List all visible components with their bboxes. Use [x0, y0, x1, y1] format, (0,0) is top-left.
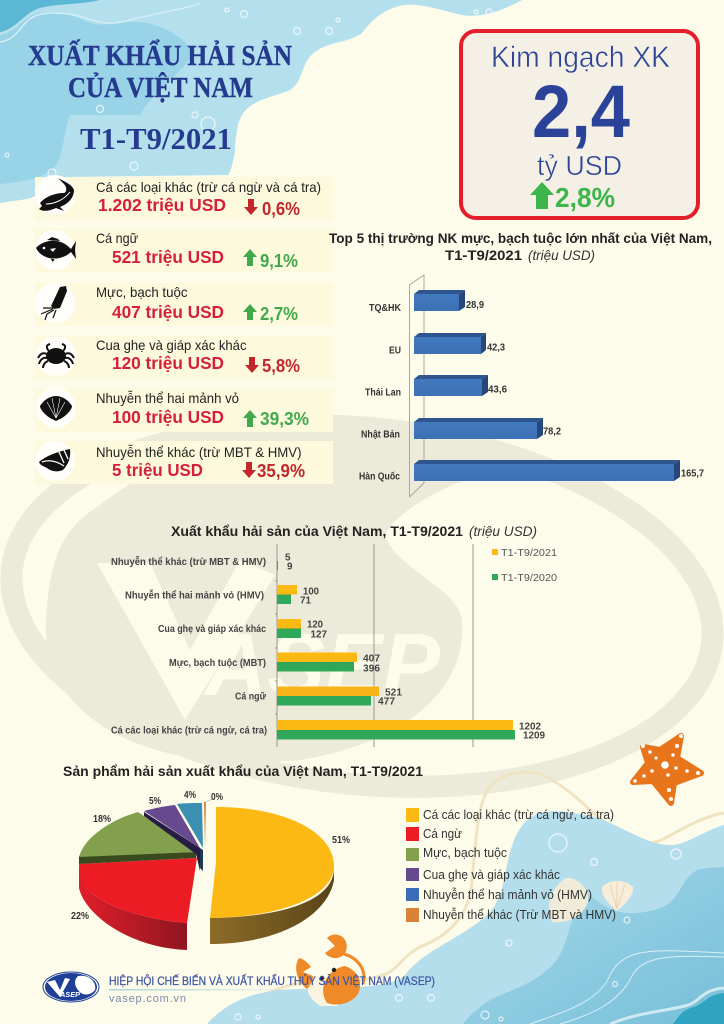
background: bottom-right water: [207, 772, 724, 1024]
heading: product share: Sản phẩm hải sản xuất khẩu của Việt Nam, T1-T9/2021: [63, 763, 423, 779]
legend: years: T1-T9/2020: [501, 573, 557, 584]
bar: Korea: Hàn Quốc: [359, 470, 400, 482]
row: crab: Cua ghẹ và giáp xác khác: [96, 337, 246, 353]
footer: association name: HIỆP HỘI CHẾ BIẾN VÀ XUẤT KHẨU THỦY SẢN VIỆT NAM (VASEP): [109, 973, 435, 988]
icon: decorative shells on water: [549, 878, 633, 922]
bar: Thailand: 43,6: [488, 384, 507, 396]
row: other fish: 1202: [519, 722, 541, 732]
panel: product list: [35, 175, 333, 484]
panel: total export value: [461, 31, 698, 218]
bar: Korea: 165,7: [681, 468, 704, 480]
heading: top 5 markets: (triệu USD): [528, 247, 595, 263]
slice: other molluscs 0%: [204, 792, 223, 848]
slice: other fish 51%: 51%: [332, 835, 350, 846]
slice: other molluscs 0%: 0%: [211, 792, 223, 803]
row: squid octopus: 407: [363, 654, 380, 664]
legend: products: Mực, bạch tuộc: [423, 846, 507, 860]
chart gridlines: [275, 544, 473, 747]
row: tuna: 477: [378, 696, 395, 708]
row: other fish: [35, 175, 333, 220]
bar: Thailand: Thái Lan: [365, 388, 401, 398]
slice: tuna 22%: [71, 858, 197, 950]
row: tuna: 521: [385, 688, 402, 698]
panel: product share pie chart: [63, 763, 616, 950]
row: conch: [35, 441, 333, 484]
legend: years: T1-T9/2021: [501, 548, 557, 559]
bar: EU: [389, 333, 505, 356]
bar: TQ&HK: [369, 290, 484, 314]
row: tuna: [35, 229, 333, 272]
panel: top 5 markets chart: [329, 230, 712, 497]
slice: crustaceans 5%: 5%: [149, 796, 161, 807]
panel: total export value: Kim ngạch XK: [491, 41, 670, 74]
row: bivalves: 100: [303, 586, 319, 598]
slice: crustaceans 5%: [144, 796, 200, 871]
footer: VASEP logo: ASEP: [59, 992, 80, 999]
slice: bivalves 4%: 4%: [184, 790, 196, 801]
footer: association name: vasep.com.vn: [109, 993, 186, 1005]
row: other molluscs: [111, 552, 293, 572]
title: T1-T9/2021: [80, 121, 232, 156]
row: tuna: 9,1%: [260, 251, 298, 271]
background: VASEP watermark: ASEP: [203, 615, 440, 714]
background: top-left water: [0, 0, 522, 203]
title: [28, 40, 292, 156]
panel: exports comparison chart: [111, 523, 557, 747]
legend: products: Nhuyễn thể hai mảnh vỏ (HMV): [423, 887, 592, 902]
legend: products: Nhuyễn thể khác (Trừ MBT và HMV): [423, 907, 616, 922]
row: scallop: 100 triệu USD: [112, 407, 224, 427]
bar: Thailand: [365, 375, 507, 398]
row: squid octopus: Mực, bạch tuộc (MBT): [169, 658, 266, 669]
row: conch: 5 triệu USD: [112, 460, 203, 480]
panel: total export value: 2,4: [532, 70, 630, 153]
icon: starfish: [633, 734, 701, 803]
bar: EU: 42,3: [487, 342, 505, 354]
row: other fish: [111, 720, 545, 742]
legend: years: [492, 548, 557, 584]
heading: top 5 markets: T1-T9/2021: [445, 247, 522, 263]
row: conch: 35,9%: [257, 461, 305, 481]
row: squid: 407 triệu USD: [112, 302, 224, 322]
row: other molluscs: 5: [285, 552, 291, 564]
slice: other fish 51%: [210, 807, 350, 944]
legend: products: Cua ghẹ và giáp xác khác: [423, 868, 560, 882]
row: crustaceans: [158, 619, 327, 640]
row: conch: Nhuyễn thể khác (trừ MBT & HMV): [96, 444, 302, 460]
row: crab: 5,8%: [262, 356, 300, 376]
row: squid: 2,7%: [260, 304, 298, 324]
legend: products: Cá ngừ: [423, 827, 462, 841]
slice: squid octopus 18%: [79, 812, 196, 864]
title: XUẤT KHẨU HẢI SẢN: [28, 40, 292, 72]
row: crustaceans: 127: [310, 630, 327, 640]
row: crustaceans: Cua ghẹ và giáp xác khác: [158, 624, 266, 635]
bar: Korea: [359, 460, 704, 482]
icon: crab mascot: [296, 935, 364, 1006]
row: other molluscs: 9: [287, 562, 293, 572]
row: other fish: Cá các loại khác (trừ cá ngừ và cá tra): [96, 179, 321, 195]
heading: top 5 markets: Top 5 thị trường NK mực, bạch tuộc lớn nhất của Việt Nam,: [329, 230, 712, 246]
background: VASEP watermark: [0, 392, 724, 820]
bar: EU: EU: [389, 346, 401, 356]
row: squid: Mực, bạch tuộc: [96, 284, 188, 300]
slice: tuna 22%: 22%: [71, 911, 89, 922]
row: other fish: Cá các loại khác (trừ cá ngừ, cá tra): [111, 726, 267, 736]
slice: squid octopus 18%: 18%: [93, 814, 111, 825]
row: scallop: [35, 388, 333, 432]
bar: TQ&HK: TQ&HK: [369, 303, 402, 314]
panel: total export value: tỷ USD: [537, 150, 622, 181]
footer: VASEP logo: [43, 972, 99, 1002]
heading: exports comparison: (triệu USD): [469, 523, 537, 539]
bar: Japan: Nhật Bản: [361, 430, 400, 440]
row: other fish: 1209: [523, 730, 545, 742]
row: squid octopus: 396: [363, 664, 380, 674]
row: bivalves: [125, 585, 319, 606]
row: scallop: 39,3%: [260, 409, 309, 429]
legend: products: [406, 808, 616, 922]
row: crab: [35, 336, 333, 379]
row: bivalves: Nhuyễn thể hai mảnh vỏ (HMV): [125, 588, 264, 602]
bar: Japan: [361, 418, 561, 440]
row: crab: 120 triệu USD: [112, 353, 224, 373]
heading: exports comparison: Xuất khẩu hải sản của Việt Nam, T1-T9/2021: [171, 523, 463, 539]
bar: Japan: 78,2: [543, 426, 561, 438]
panel: total export value: 2,8%: [555, 182, 615, 213]
row: tuna: [235, 686, 402, 708]
row: crustaceans: 120: [307, 620, 323, 630]
legend: products: Cá các loại khác (trừ cá ngừ, cá tra): [423, 808, 614, 822]
slice: bivalves 4%: [177, 790, 203, 871]
row: squid: [35, 283, 333, 326]
row: scallop: Nhuyễn thể hai mảnh vỏ: [96, 390, 239, 406]
footer: association name: [109, 973, 435, 1005]
row: tuna: 521 triệu USD: [112, 247, 224, 267]
row: other fish: 1.202 triệu USD: [98, 195, 226, 215]
row: other molluscs: Nhuyễn thể khác (trừ MBT & HMV): [111, 555, 266, 568]
bar: TQ&HK: 28,9: [466, 300, 484, 311]
row: bivalves: 71: [300, 596, 311, 606]
row: other fish: 0,6%: [262, 199, 300, 219]
row: tuna: Cá ngữ: [235, 692, 267, 702]
heading: top 5 markets: [329, 230, 712, 263]
row: tuna: Cá ngữ: [96, 230, 138, 246]
chart axis wall: [410, 275, 424, 497]
title: CỦA VIỆT NAM: [68, 73, 253, 104]
row: squid octopus: [169, 652, 380, 674]
